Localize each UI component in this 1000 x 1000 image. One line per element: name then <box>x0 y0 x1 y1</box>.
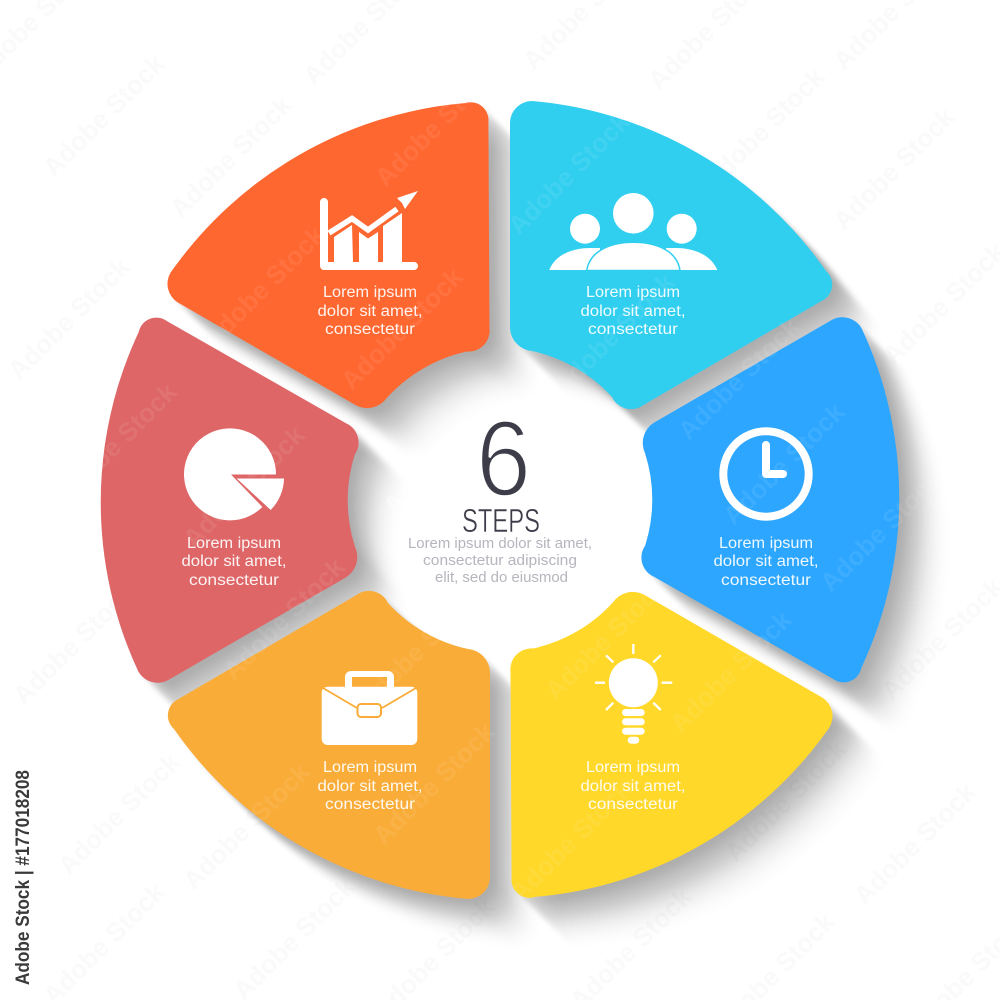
panel: orange segment <box>159 13 587 446</box>
text: red label: dolor sit amet, <box>182 553 286 570</box>
foreground watermark: Adobe Stock <box>672 311 806 445</box>
text: red label: Lorem ipsum <box>187 535 281 552</box>
center description: elit, sed do eiusmod <box>435 569 568 586</box>
panel: cyan segment <box>510 101 832 409</box>
foreground watermark: Adobe Stock <box>377 386 511 520</box>
icon: pie chart <box>184 428 284 520</box>
center description: Lorem ipsum dolor sit amet, <box>408 535 592 552</box>
text: orange label: Lorem ipsum <box>323 284 417 301</box>
icon: clock <box>723 431 809 517</box>
background watermark: Adobe Stock <box>177 761 311 895</box>
foreground watermark: Adobe Stock <box>502 106 636 240</box>
text: cyan label <box>580 284 686 338</box>
panel: yellow segment <box>413 554 841 987</box>
background watermark: Adobe Stock <box>52 746 186 880</box>
background watermark: Adobe Stock <box>37 48 171 182</box>
foreground watermark: Adobe Stock <box>197 219 331 353</box>
foreground watermark: Adobe Stock <box>217 551 351 685</box>
text: blue label: consectetur <box>721 572 811 589</box>
foreground watermark: Adobe Stock <box>664 604 798 738</box>
foreground watermark: Adobe Stock <box>367 716 501 850</box>
foreground watermark: Adobe Stock <box>369 58 503 192</box>
icon: growth chart <box>320 191 418 270</box>
text: yellow label <box>580 759 686 813</box>
background watermark: Adobe Stock <box>848 776 982 910</box>
stock id side label: Adobe Stock | #177018208 <box>13 770 34 985</box>
icon: people group <box>549 193 717 270</box>
foreground watermark: Adobe Stock <box>717 396 851 530</box>
foreground watermark: Adobe Stock <box>547 266 681 400</box>
text: amber label <box>318 759 422 813</box>
foreground watermark: Adobe Stock <box>177 419 311 553</box>
text: amber label: dolor sit amet, <box>318 778 422 795</box>
foreground watermark: Adobe Stock <box>504 773 638 907</box>
text: blue label: Lorem ipsum <box>719 535 813 552</box>
text: orange label: dolor sit amet, <box>318 303 422 320</box>
center number 6: 6 <box>476 398 531 518</box>
background watermark: Adobe Stock <box>164 89 298 223</box>
icon: briefcase <box>322 671 417 745</box>
text: cyan label: Lorem ipsum <box>586 284 680 301</box>
icon: light bulb <box>595 644 672 744</box>
panel: amber segment <box>168 591 490 899</box>
text: blue label: dolor sit amet, <box>714 553 818 570</box>
background watermark: Adobe Stock <box>7 576 141 710</box>
text: cyan label: consectetur <box>588 321 678 338</box>
background watermark: Adobe Stock <box>2 251 136 385</box>
text: red label: consectetur <box>189 572 279 589</box>
foreground watermark <box>49 58 948 907</box>
foreground watermark: Adobe Stock <box>814 463 948 597</box>
text: orange label: consectetur <box>325 321 415 338</box>
text: blue label <box>714 535 818 589</box>
background watermark: Adobe Stock <box>827 101 961 235</box>
text: yellow label: dolor sit amet, <box>580 778 686 795</box>
text: amber label: Lorem ipsum <box>323 759 417 776</box>
foreground watermark: Adobe Stock <box>182 756 316 890</box>
background watermark: Adobe Stock <box>697 61 831 195</box>
foreground watermark: Adobe Stock <box>49 376 183 510</box>
text: yellow label: consectetur <box>588 796 678 813</box>
text: amber label: consectetur <box>325 796 415 813</box>
foreground watermark: Adobe Stock <box>335 261 469 395</box>
panel: red segment <box>0 258 416 691</box>
text: red label <box>182 535 286 589</box>
background watermark: Adobe Stock <box>719 733 853 867</box>
foreground watermark: Adobe Stock <box>539 571 673 705</box>
foreground watermark: Adobe Stock <box>352 581 486 715</box>
text: cyan label: dolor sit amet, <box>580 303 686 320</box>
center description <box>408 535 592 586</box>
text: yellow label: Lorem ipsum <box>586 759 680 776</box>
center heading STEPS: STEPS <box>462 502 540 539</box>
panel: blue segment <box>584 309 1000 742</box>
center description: consectetur adipiscing <box>423 552 577 569</box>
text: orange label <box>318 284 422 338</box>
